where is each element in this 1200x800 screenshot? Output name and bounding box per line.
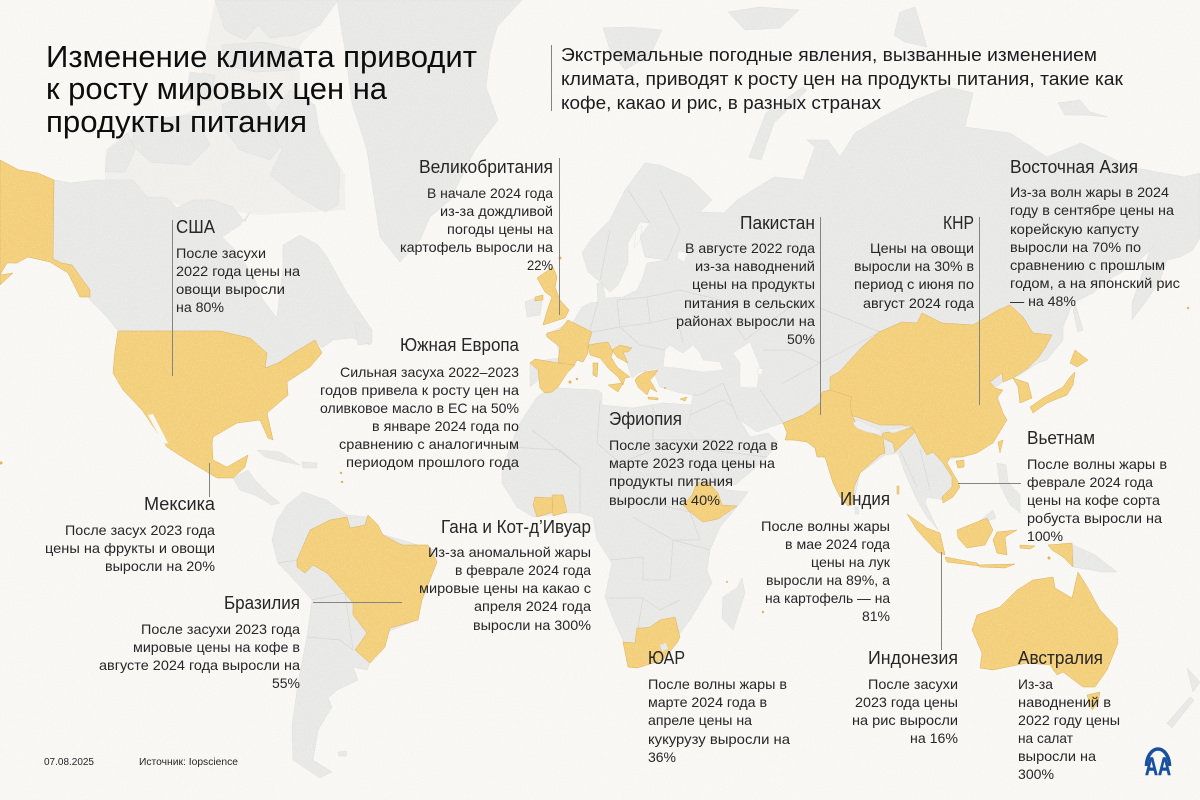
Java — [945, 557, 980, 566]
callout: South Africa: апреле цены на — [648, 712, 752, 728]
callout: China: КНР — [943, 213, 974, 233]
callout: Australia: на салат — [1018, 730, 1074, 746]
callout: Australia: Австралия — [1018, 648, 1103, 668]
callout: Australia: 300% — [1018, 766, 1054, 782]
callout: India: Индия — [840, 489, 890, 509]
callout: Indonesia: После засухи — [868, 676, 958, 692]
small islands — [0, 256, 1189, 613]
Andaman islands — [897, 486, 899, 494]
Honshu, Japan — [1030, 372, 1075, 413]
callout: China: период с июня по — [854, 276, 974, 292]
Borneo — [957, 518, 993, 548]
Korea — [1013, 378, 1032, 403]
callout: Southern Europe: Южная Европа — [400, 335, 520, 355]
callout: United Kingdom: погоды цены на — [447, 221, 553, 237]
callout: United Kingdom: картофель выросли на — [400, 239, 553, 255]
callout: China: август 2024 года — [863, 295, 974, 311]
China and Mongolia — [830, 305, 1052, 503]
callout: China: выросли на 30% в — [854, 258, 974, 274]
callout: East Asia: Восточная Азия — [1010, 157, 1138, 177]
Lesotho and Nepal — [660, 420, 910, 651]
callout: Vietnam: цены на кофе сорта — [1027, 492, 1160, 508]
callout: Vietnam — [1027, 428, 1167, 544]
Taiwan — [998, 440, 1003, 453]
Arctic archipelago mottled base — [105, 0, 345, 215]
callout: Mexico: Мексика — [144, 494, 216, 514]
callout: Mexico: выросли на 20% — [105, 558, 215, 574]
intro text: Экстремальные погодные явления, вызванные изменением — [561, 44, 1097, 65]
callout: Pakistan: из-за наводнений — [695, 258, 815, 274]
callout: United Kingdom: В начале 2024 года — [427, 185, 553, 201]
callout: South Africa: кукурузу выросли на — [648, 731, 790, 747]
Sumatra — [907, 514, 945, 555]
callout: Brazil: мировые цены на кофе в — [133, 639, 300, 655]
callout: Indonesia: на 16% — [910, 730, 958, 746]
United Kingdom — [537, 267, 569, 325]
callout: Vietnam: После волны жары в — [1027, 456, 1167, 472]
callout: USA: 2022 года цены на — [176, 263, 300, 279]
callout: United Kingdom: из-за дождливой — [440, 203, 553, 219]
callout: Mexico — [45, 494, 216, 574]
callout: USA: на 80% — [176, 299, 224, 315]
Alaska — [0, 160, 90, 297]
callout: Pakistan: 50% — [787, 331, 815, 347]
callout: Indonesia: на рис выросли — [852, 712, 958, 728]
callout: India: После волны жары — [761, 518, 890, 534]
callout: India: выросли на 89%, а — [766, 572, 890, 588]
callout: Vietnam: феврале 2024 года — [1027, 474, 1153, 490]
intro text: климата, приводят к росту цен на продукты питания, такие как — [561, 68, 1124, 89]
Northern Ireland — [535, 295, 543, 301]
title: к росту мировых цен на — [46, 71, 388, 106]
callout: Ethiopia: Эфиопия — [609, 409, 682, 429]
callout: South Africa — [648, 648, 790, 765]
footer date: 07.08.2025 — [44, 757, 94, 768]
Maluku — [1020, 545, 1035, 549]
callout: Southern Europe: сравнению с аналогичным — [339, 436, 519, 452]
callout: Pakistan: питания в сельских — [684, 295, 815, 311]
callout: Ethiopia: продукты питания — [609, 473, 733, 489]
Gulf of California slit — [148, 414, 168, 444]
callout: Southern Europe: в январе 2024 года по — [372, 418, 519, 434]
Pakistan and India — [783, 390, 915, 506]
callout: Ghana and Ivory Coast: в феврале 2024 года — [455, 562, 591, 578]
Crete and Cyprus — [648, 397, 658, 400]
Sardinia and Corsica — [593, 363, 598, 377]
Croatia — [612, 345, 632, 363]
leader lines — [172, 158, 1021, 650]
callout: USA: После засухи — [176, 245, 266, 261]
intro text: кофе, какао и рис, в разных странах — [561, 92, 882, 113]
Australia — [972, 572, 1118, 687]
callout: East Asia: годом, а на японский рис — [1010, 275, 1180, 291]
callout: Vietnam: робуста выросли на — [1027, 510, 1162, 526]
callout: Brazil — [99, 593, 300, 691]
Hokkaido, Japan — [1070, 350, 1088, 367]
France — [547, 320, 592, 367]
callout: Ethiopia — [609, 409, 778, 508]
highlighted countries in gold — [0, 160, 1189, 710]
South Africa — [623, 617, 680, 668]
Lesser Sunda — [977, 564, 1015, 568]
callout: Brazil: После засухи 2023 года — [141, 621, 300, 637]
callout: Southern Europe: оливковое масло в ЕС на 50% — [320, 400, 519, 416]
callout: Australia: 2022 году цены — [1018, 712, 1120, 728]
callout: Australia: выросли на — [1018, 748, 1096, 764]
callout: China — [854, 213, 974, 311]
callout: South Africa: ЮАР — [648, 648, 685, 668]
callout: East Asia — [1010, 157, 1180, 309]
callout: China: Цены на овощи — [870, 240, 974, 256]
callout: India: цены на лук — [811, 554, 891, 570]
callout: Ghana and Ivory Coast — [419, 517, 591, 633]
title: продукты питания — [46, 104, 307, 139]
callout: India: в мае 2024 года — [785, 536, 890, 552]
Spain — [530, 359, 575, 393]
Western New Guinea — [1048, 543, 1073, 567]
Ethiopia — [683, 482, 737, 522]
callout: Ethiopia: выросли на 40% — [609, 492, 720, 508]
callout: India: на картофель — на — [765, 590, 890, 606]
Italy — [588, 342, 630, 385]
callout: Brazil: Бразилия — [224, 593, 300, 613]
footer source: Источник: Iopscience — [139, 757, 238, 768]
callout: Southern Europe: периодом прошлого года — [346, 454, 519, 470]
callout: Ethiopia: После засухи 2022 года в — [609, 437, 778, 453]
callout: Indonesia — [852, 648, 958, 746]
USA and Mexico — [113, 331, 322, 478]
callout: Australia: Из-за — [1018, 676, 1053, 692]
callout: Ethiopia: марте 2023 года цены на — [609, 455, 775, 471]
icon: Anadolu Agency logo: AA — [1145, 753, 1171, 781]
Tasmania — [1087, 692, 1100, 710]
inland seas and light countries — [634, 226, 763, 388]
callout: Ghana and Ivory Coast: Гана и Кот-д’Ивуар — [441, 517, 591, 537]
callout: South Africa: После волны жары в — [648, 676, 787, 692]
callout: India — [761, 489, 891, 624]
callout: Southern Europe — [320, 335, 520, 470]
callout: USA: овощи выросли — [176, 281, 285, 297]
callout: East Asia: году в сентябре цены на — [1010, 202, 1174, 218]
callout: USA — [176, 217, 300, 315]
callout: Brazil: 55% — [272, 675, 300, 691]
callout: Pakistan: цены на продукты — [692, 276, 815, 292]
callout: East Asia: Из-за волн жары в 2024 — [1010, 184, 1169, 200]
callout: Ghana and Ivory Coast: Из-за аномальной жары — [428, 544, 591, 560]
callout: Mexico: После засух 2023 года — [65, 522, 215, 538]
callout: Brazil: августе 2024 года выросли на — [99, 657, 300, 673]
Sicily — [608, 383, 623, 392]
Hainan — [956, 460, 964, 468]
callout: United Kingdom — [400, 157, 553, 273]
callout: United Kingdom: 22% — [527, 257, 553, 273]
Ivory Coast — [533, 497, 553, 517]
callout: Ghana and Ivory Coast: апреля 2024 года — [474, 598, 591, 614]
callout: Southern Europe: Сильная засуха 2022–2023 — [340, 364, 519, 380]
title — [46, 39, 477, 139]
callout: India: 81% — [862, 608, 890, 624]
callout: South Africa: марте 2024 года в — [648, 694, 767, 710]
callout: Pakistan — [676, 213, 815, 347]
callout: South Africa: 36% — [648, 749, 676, 765]
country borders — [278, 190, 930, 650]
callout: East Asia: сравнению с прошлым — [1010, 257, 1165, 273]
Brazil — [297, 515, 437, 663]
callout: Ghana and Ivory Coast: выросли на 300% — [473, 617, 591, 633]
callout: Pakistan: Пакистан — [740, 213, 815, 233]
callout: United Kingdom: Великобритания — [419, 157, 553, 177]
callout: Southern Europe: годов привела к росту цен на — [320, 382, 519, 398]
callout: Pakistan: В августе 2022 года — [685, 240, 815, 256]
callout: Pakistan: районах выросли на — [676, 313, 815, 329]
icon: Anadolu Agency logo — [1145, 749, 1171, 781]
callout: Australia — [1018, 648, 1120, 782]
callout: Indonesia: Индонезия — [868, 648, 958, 668]
callout: Vietnam: 100% — [1027, 528, 1063, 544]
callout: Australia: наводнений в — [1018, 694, 1111, 710]
callout: East Asia: корейскую капусту — [1010, 221, 1139, 237]
Ghana — [552, 495, 567, 516]
intro text — [552, 44, 1124, 113]
callout: Vietnam: Вьетнам — [1027, 428, 1095, 448]
callout: USA: США — [176, 217, 215, 237]
title: Изменение климата приводит — [46, 39, 477, 74]
callout: East Asia: — на 48% — [1010, 293, 1076, 309]
callout: Ghana and Ivory Coast: мировые цены на какао с — [419, 580, 591, 596]
Sulawesi — [993, 530, 1017, 555]
callout: Indonesia: 2023 года цены — [855, 694, 958, 710]
callout: East Asia: выросли на 70% по — [1010, 239, 1141, 255]
callout: Mexico: цены на фрукты и овощи — [45, 540, 215, 556]
Greece — [635, 370, 658, 395]
